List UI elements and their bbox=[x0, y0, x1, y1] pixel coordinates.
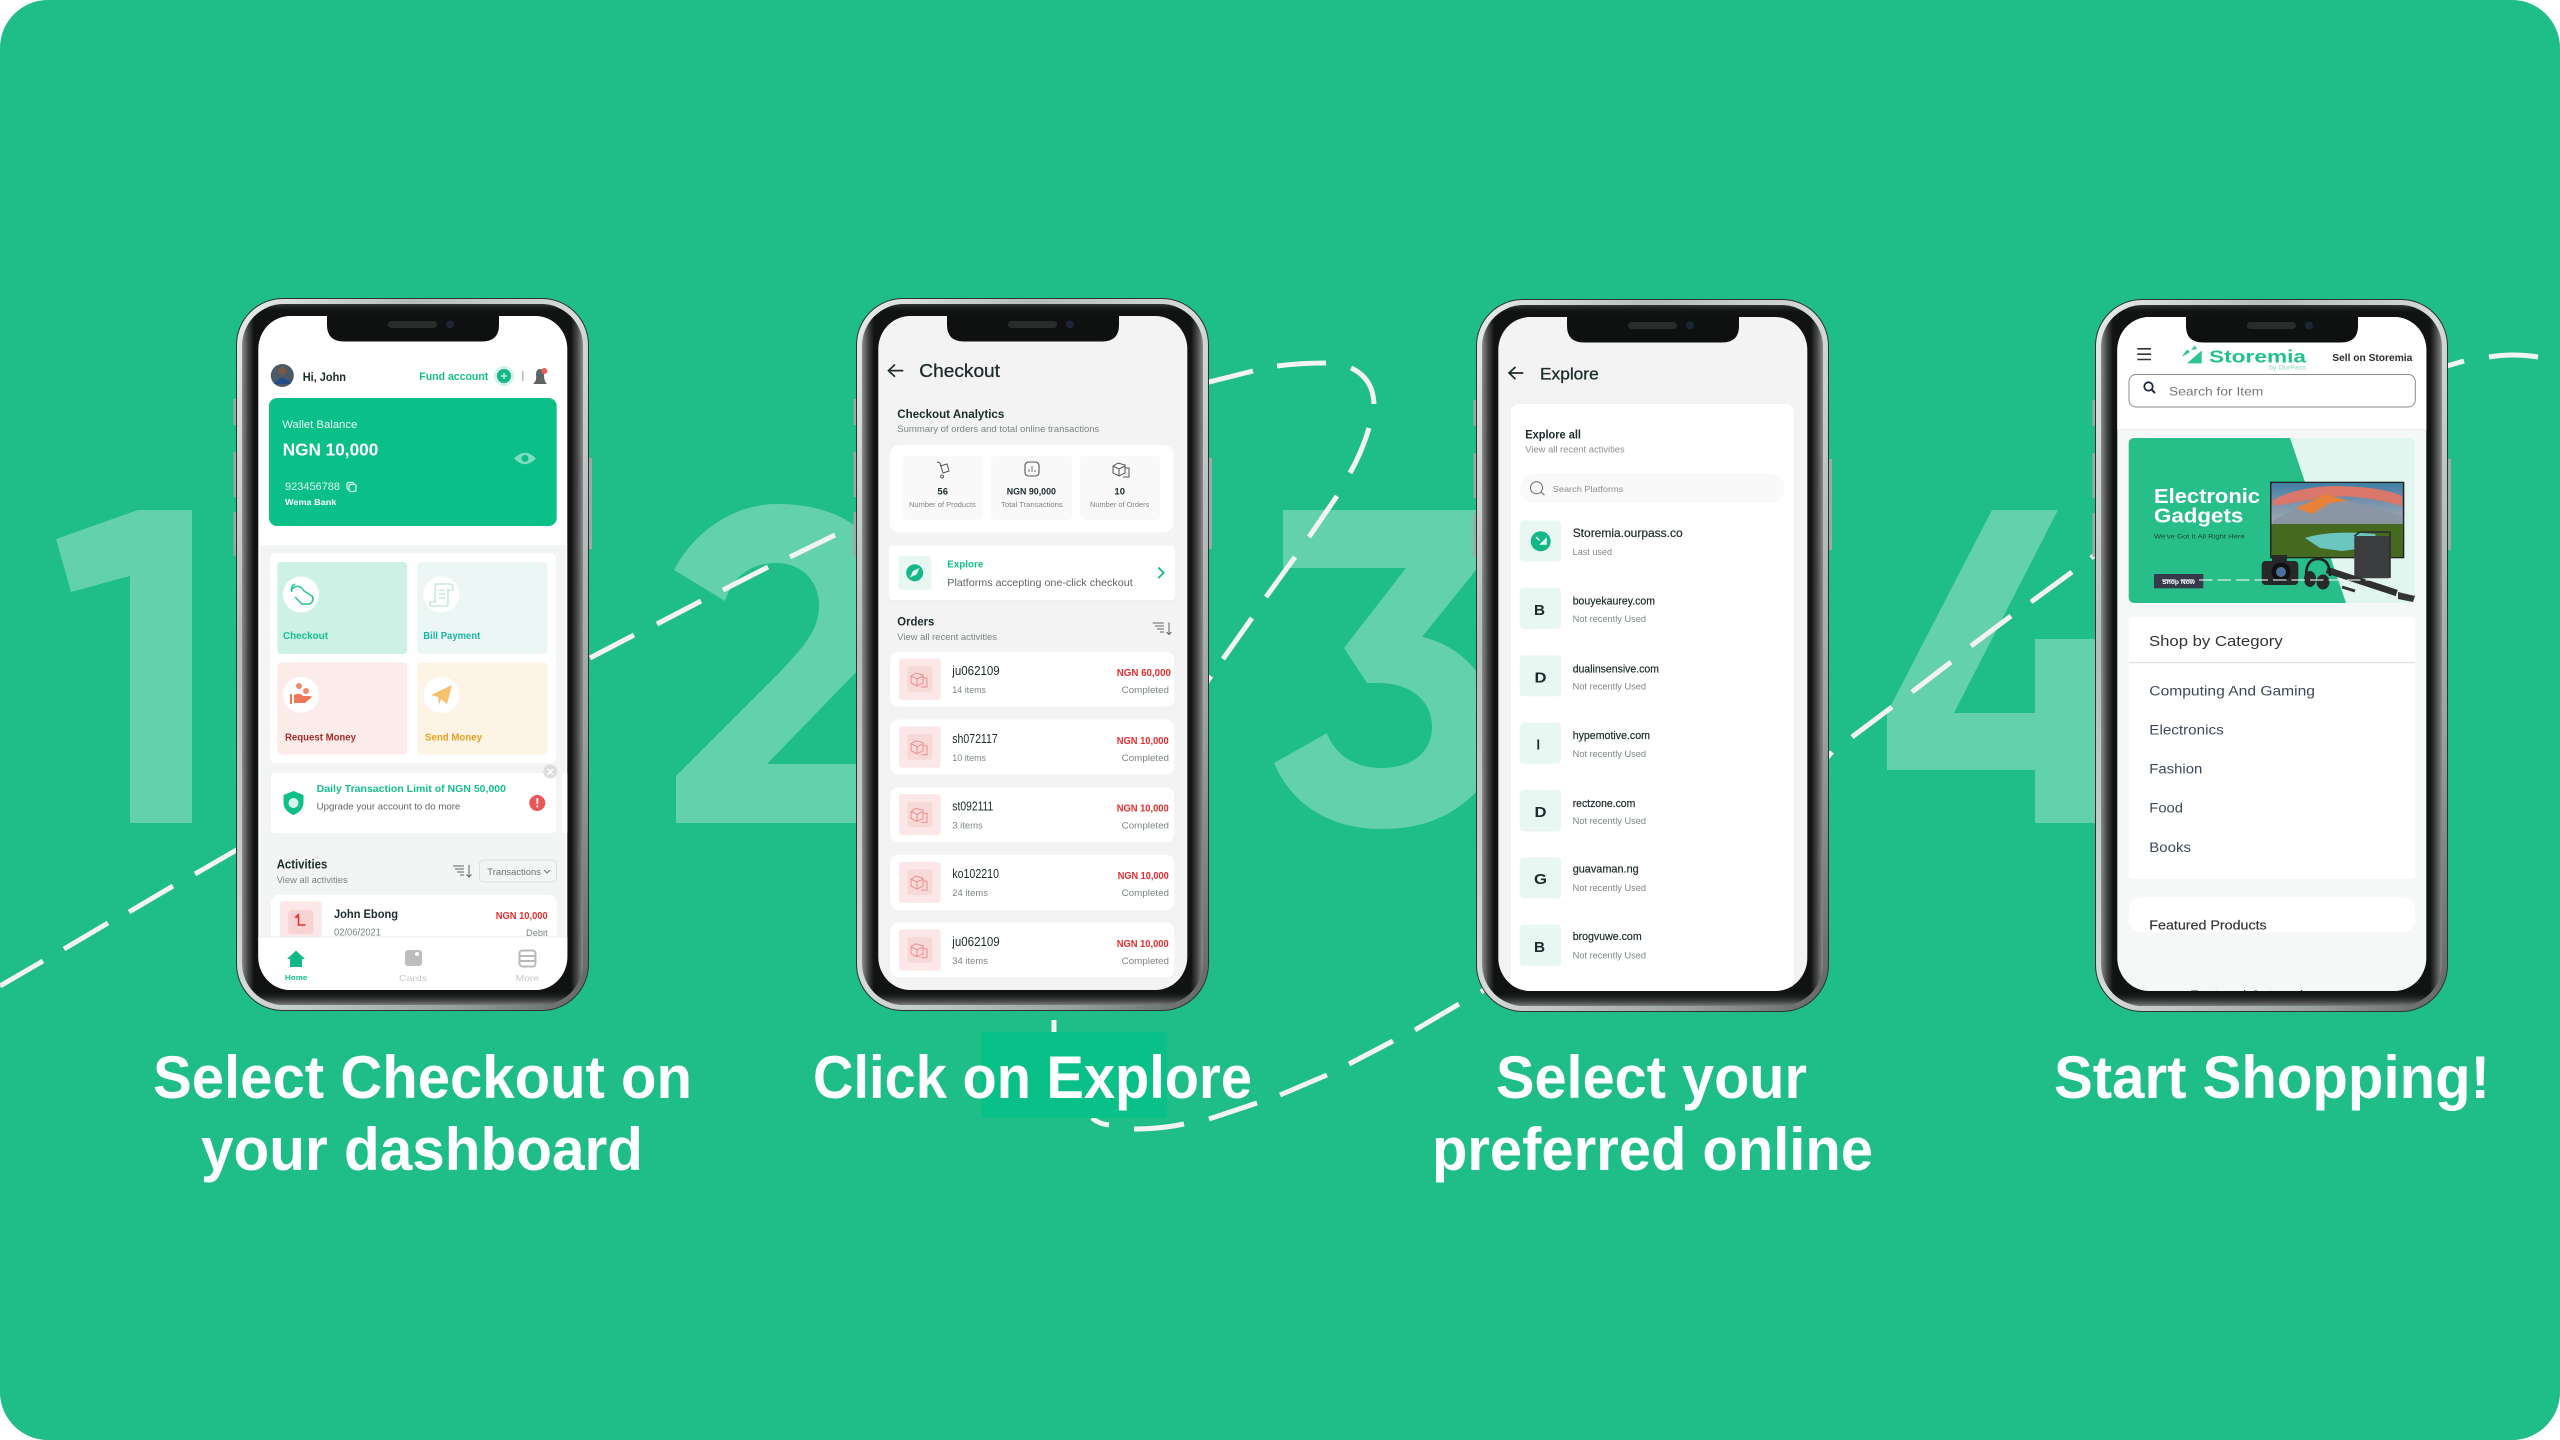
dashed connector path bbox=[0, 355, 2538, 1129]
quick actions card bbox=[270, 553, 556, 763]
order row 1: ju062109 bbox=[951, 664, 1000, 678]
search box: Search for Item bbox=[2169, 384, 2263, 398]
order row 5: NGN 10,000 bbox=[1117, 938, 1169, 950]
platform: dualinsensive bbox=[1520, 655, 1659, 696]
platform: bouyekaurey: Not recently Used bbox=[1573, 614, 1646, 624]
tile: request money: Request Money bbox=[285, 732, 356, 744]
orders heading: View all recent activities bbox=[897, 632, 997, 643]
order row 1: 14 items bbox=[952, 685, 986, 696]
panel heading: Explore all bbox=[1525, 430, 1581, 442]
step 2 caption: Click on Explore bbox=[813, 1044, 1252, 1111]
platform: bouyekaurey: B bbox=[1534, 602, 1545, 619]
screen: dashboard bbox=[258, 316, 568, 991]
background numeral 3 bbox=[1274, 510, 1480, 829]
store header: Sell on Storemia bbox=[2332, 353, 2413, 364]
order row 1 bbox=[890, 652, 1174, 707]
platform: guavaman: guavaman.ng bbox=[1573, 863, 1639, 875]
platform: dualinsensive: Not recently Used bbox=[1573, 682, 1646, 692]
order row 5: 34 items bbox=[952, 956, 988, 967]
step 1 caption: Select Checkout on bbox=[153, 1044, 692, 1111]
order row 4 bbox=[890, 855, 1174, 910]
activity row: 02/06/2021 bbox=[334, 927, 381, 938]
bottom navigation: Home bbox=[285, 973, 307, 982]
content background bbox=[260, 545, 566, 937]
transaction limit card: Upgrade your account to do more bbox=[317, 801, 460, 812]
platform: guavaman bbox=[1520, 857, 1646, 898]
order row 3: NGN 10,000 bbox=[1117, 802, 1169, 814]
back arrow bbox=[888, 364, 903, 377]
transaction limit card: Daily Transaction Limit of NGN 50,000 bbox=[317, 783, 506, 795]
category panel: Shop by Category bbox=[2149, 633, 2283, 650]
platform: brogvuwe: B bbox=[1534, 939, 1545, 956]
analytics card: 56 bbox=[937, 487, 948, 498]
promo banner bbox=[2129, 438, 2415, 603]
activity row: Debit bbox=[526, 928, 548, 939]
phone frame bbox=[854, 298, 1212, 1011]
platform: dualinsensive: dualinsensive.com bbox=[1573, 664, 1659, 676]
order row 2: NGN 10,000 bbox=[1117, 735, 1169, 747]
platform: guavaman: Not recently Used bbox=[1573, 883, 1646, 893]
background numeral 2 bbox=[674, 504, 860, 823]
panel heading bbox=[1525, 430, 1625, 455]
back arrow bbox=[1509, 367, 1523, 379]
television bbox=[2270, 482, 2404, 560]
step 3 caption: preferred online bbox=[1432, 1116, 1873, 1183]
order row 2 bbox=[890, 720, 1174, 774]
tile: request money bbox=[277, 662, 407, 754]
notch bbox=[327, 315, 499, 342]
category panel: Food bbox=[2149, 801, 2183, 816]
search box bbox=[2129, 374, 2415, 407]
shop now button bbox=[2154, 574, 2203, 588]
activities header: Transactions bbox=[487, 867, 541, 878]
order row 5: ju062109 bbox=[951, 935, 1000, 949]
wallet balance card bbox=[269, 398, 557, 526]
platform: hypemotive bbox=[1520, 723, 1650, 764]
order row 4: NGN 10,000 bbox=[1118, 870, 1169, 882]
order row 5: Completed bbox=[1122, 956, 1169, 967]
explore panel background bbox=[1511, 404, 1794, 1004]
order row 3: st092111 bbox=[952, 799, 993, 813]
category panel: Computing And Gaming bbox=[2149, 683, 2315, 698]
order row 2: sh072117 bbox=[952, 732, 998, 746]
activity row bbox=[271, 895, 556, 936]
transaction limit card bbox=[271, 764, 568, 833]
search bar bbox=[1530, 481, 1623, 496]
tile: send money bbox=[417, 662, 548, 754]
phone 3: explore bbox=[1474, 299, 1832, 1012]
platform: bouyekaurey: bouyekaurey.com bbox=[1573, 595, 1655, 607]
analytics heading bbox=[898, 409, 1099, 434]
platform: guavaman: G bbox=[1534, 871, 1547, 888]
orders heading bbox=[897, 616, 1172, 640]
analytics card: Number of Orders bbox=[1090, 500, 1150, 509]
category panel: Fashion bbox=[2149, 761, 2202, 776]
platform: brogvuwe: brogvuwe.com bbox=[1573, 931, 1642, 943]
platform: storemia: Storemia.ourpass.co bbox=[1573, 526, 1683, 540]
order row 5 bbox=[890, 923, 1174, 977]
phone frame bbox=[1474, 299, 1832, 1012]
headphones bbox=[2304, 559, 2330, 590]
phone frame bbox=[2092, 299, 2451, 1012]
promo banner: We've Got It All Right Here bbox=[2154, 533, 2245, 540]
platform: bouyekaurey bbox=[1520, 588, 1655, 629]
order row 2: Completed bbox=[1122, 753, 1169, 764]
order row 4: ko102210 bbox=[952, 867, 999, 881]
analytics heading: Summary of orders and total online transactions bbox=[897, 424, 1100, 435]
platform: rectzone: rectzone.com bbox=[1573, 798, 1635, 810]
profile header bbox=[271, 364, 547, 387]
wallet balance card: 923456788 bbox=[285, 481, 340, 493]
category panel: Electronics bbox=[2149, 723, 2224, 738]
tile: send money: Send Money bbox=[425, 732, 482, 744]
platform: brogvuwe: Not recently Used bbox=[1573, 951, 1646, 961]
camera bbox=[2262, 555, 2298, 585]
order row 3: Completed bbox=[1122, 820, 1169, 831]
order row 1: Completed bbox=[1122, 685, 1169, 696]
background numeral 4 bbox=[1887, 510, 2100, 823]
background numeral 1 bbox=[56, 510, 192, 823]
tile: checkout bbox=[277, 562, 407, 654]
order row 4: 24 items bbox=[952, 888, 988, 899]
panel heading: View all recent activities bbox=[1525, 445, 1625, 455]
platform: hypemotive: I bbox=[1536, 737, 1540, 754]
analytics heading: Checkout Analytics bbox=[897, 407, 1005, 421]
category panel bbox=[2129, 617, 2415, 879]
activity row: NGN 10,000 bbox=[496, 911, 548, 922]
order row 3 bbox=[890, 787, 1174, 842]
sound system bbox=[2327, 532, 2415, 602]
screen title: Explore bbox=[1540, 364, 1599, 383]
screen title: Checkout bbox=[919, 361, 1000, 381]
order row 3: 3 items bbox=[952, 820, 983, 831]
shop now button: Shop Now bbox=[2162, 579, 2196, 586]
notch bbox=[1567, 316, 1739, 342]
phone 4: storemia shop bbox=[2092, 299, 2451, 1012]
order row 1: NGN 60,000 bbox=[1117, 667, 1171, 679]
store header bbox=[2117, 316, 2428, 430]
platform: hypemotive: hypemotive.com bbox=[1573, 730, 1650, 742]
store header: by OurPass bbox=[2269, 366, 2306, 372]
platform: storemia: Last used bbox=[1573, 547, 1612, 557]
platform: brogvuwe bbox=[1520, 925, 1646, 966]
notch bbox=[2186, 316, 2358, 342]
activity row: John Ebong bbox=[334, 907, 398, 921]
explore highlight box bbox=[981, 1032, 1167, 1118]
bottom navigation: More bbox=[516, 973, 539, 983]
profile header: Fund account bbox=[419, 371, 489, 383]
phone 2: checkout bbox=[854, 298, 1212, 1011]
tile: bill payment: Bill Payment bbox=[423, 630, 481, 642]
activities header: View all activities bbox=[277, 875, 348, 886]
order row 2: 10 items bbox=[952, 753, 986, 764]
activities header: Activities bbox=[277, 857, 327, 871]
platform: rectzone: D bbox=[1534, 804, 1547, 821]
tile: bill payment bbox=[417, 562, 548, 654]
analytics card: NGN 90,000 bbox=[1007, 487, 1056, 498]
profile header: Hi, John bbox=[303, 372, 346, 384]
search bar: Search Platforms bbox=[1553, 484, 1623, 494]
phone frame bbox=[234, 298, 592, 1011]
store header: Storemia bbox=[2209, 346, 2306, 366]
phone 1: dashboard bbox=[234, 298, 592, 1011]
analytics card: Total Transactions bbox=[1001, 500, 1063, 509]
step 3 caption bbox=[1432, 1044, 1873, 1183]
featured products panel bbox=[2129, 897, 2415, 932]
notch bbox=[947, 315, 1119, 342]
platform: storemia bbox=[1520, 520, 1683, 562]
wallet balance card: Wema Bank bbox=[285, 497, 337, 507]
explore link card: Platforms accepting one-click checkout bbox=[947, 578, 1133, 589]
analytics card: Number of Products bbox=[909, 500, 976, 509]
platform: dualinsensive: D bbox=[1534, 669, 1547, 686]
platform: rectzone: Not recently Used bbox=[1573, 816, 1646, 826]
screen: checkout bbox=[878, 316, 1188, 991]
explore link card bbox=[889, 546, 1175, 602]
screen: storemia bbox=[2117, 316, 2428, 1003]
tile: checkout: Checkout bbox=[283, 630, 328, 642]
wallet balance card: NGN 10,000 bbox=[283, 440, 379, 460]
category panel: Books bbox=[2149, 840, 2191, 855]
featured products panel: Featured Products bbox=[2149, 918, 2267, 932]
orders heading: Orders bbox=[897, 615, 935, 629]
featured categories heading, cut off: Featured Categories bbox=[2190, 987, 2318, 1003]
platform: hypemotive: Not recently Used bbox=[1573, 749, 1646, 759]
activities header bbox=[276, 859, 557, 883]
step 1 caption: your dashboard bbox=[201, 1116, 643, 1183]
platform: rectzone bbox=[1520, 790, 1646, 831]
analytics card: 10 bbox=[1114, 487, 1125, 498]
bottom navigation: Cards bbox=[399, 973, 427, 983]
step 1 caption bbox=[153, 1044, 692, 1183]
bottom navigation bbox=[258, 936, 568, 991]
promo banner: Gadgets bbox=[2154, 505, 2243, 527]
promo banner: Electronic bbox=[2154, 486, 2260, 508]
wallet balance card: Wallet Balance bbox=[282, 419, 357, 431]
order row 4: Completed bbox=[1122, 888, 1169, 899]
step 4 caption: Start Shopping! bbox=[2054, 1044, 2490, 1111]
explore link card: Explore bbox=[947, 558, 983, 570]
step 3 caption: Select your bbox=[1496, 1044, 1807, 1111]
analytics card bbox=[890, 445, 1173, 532]
screen: explore bbox=[1498, 316, 1808, 1004]
